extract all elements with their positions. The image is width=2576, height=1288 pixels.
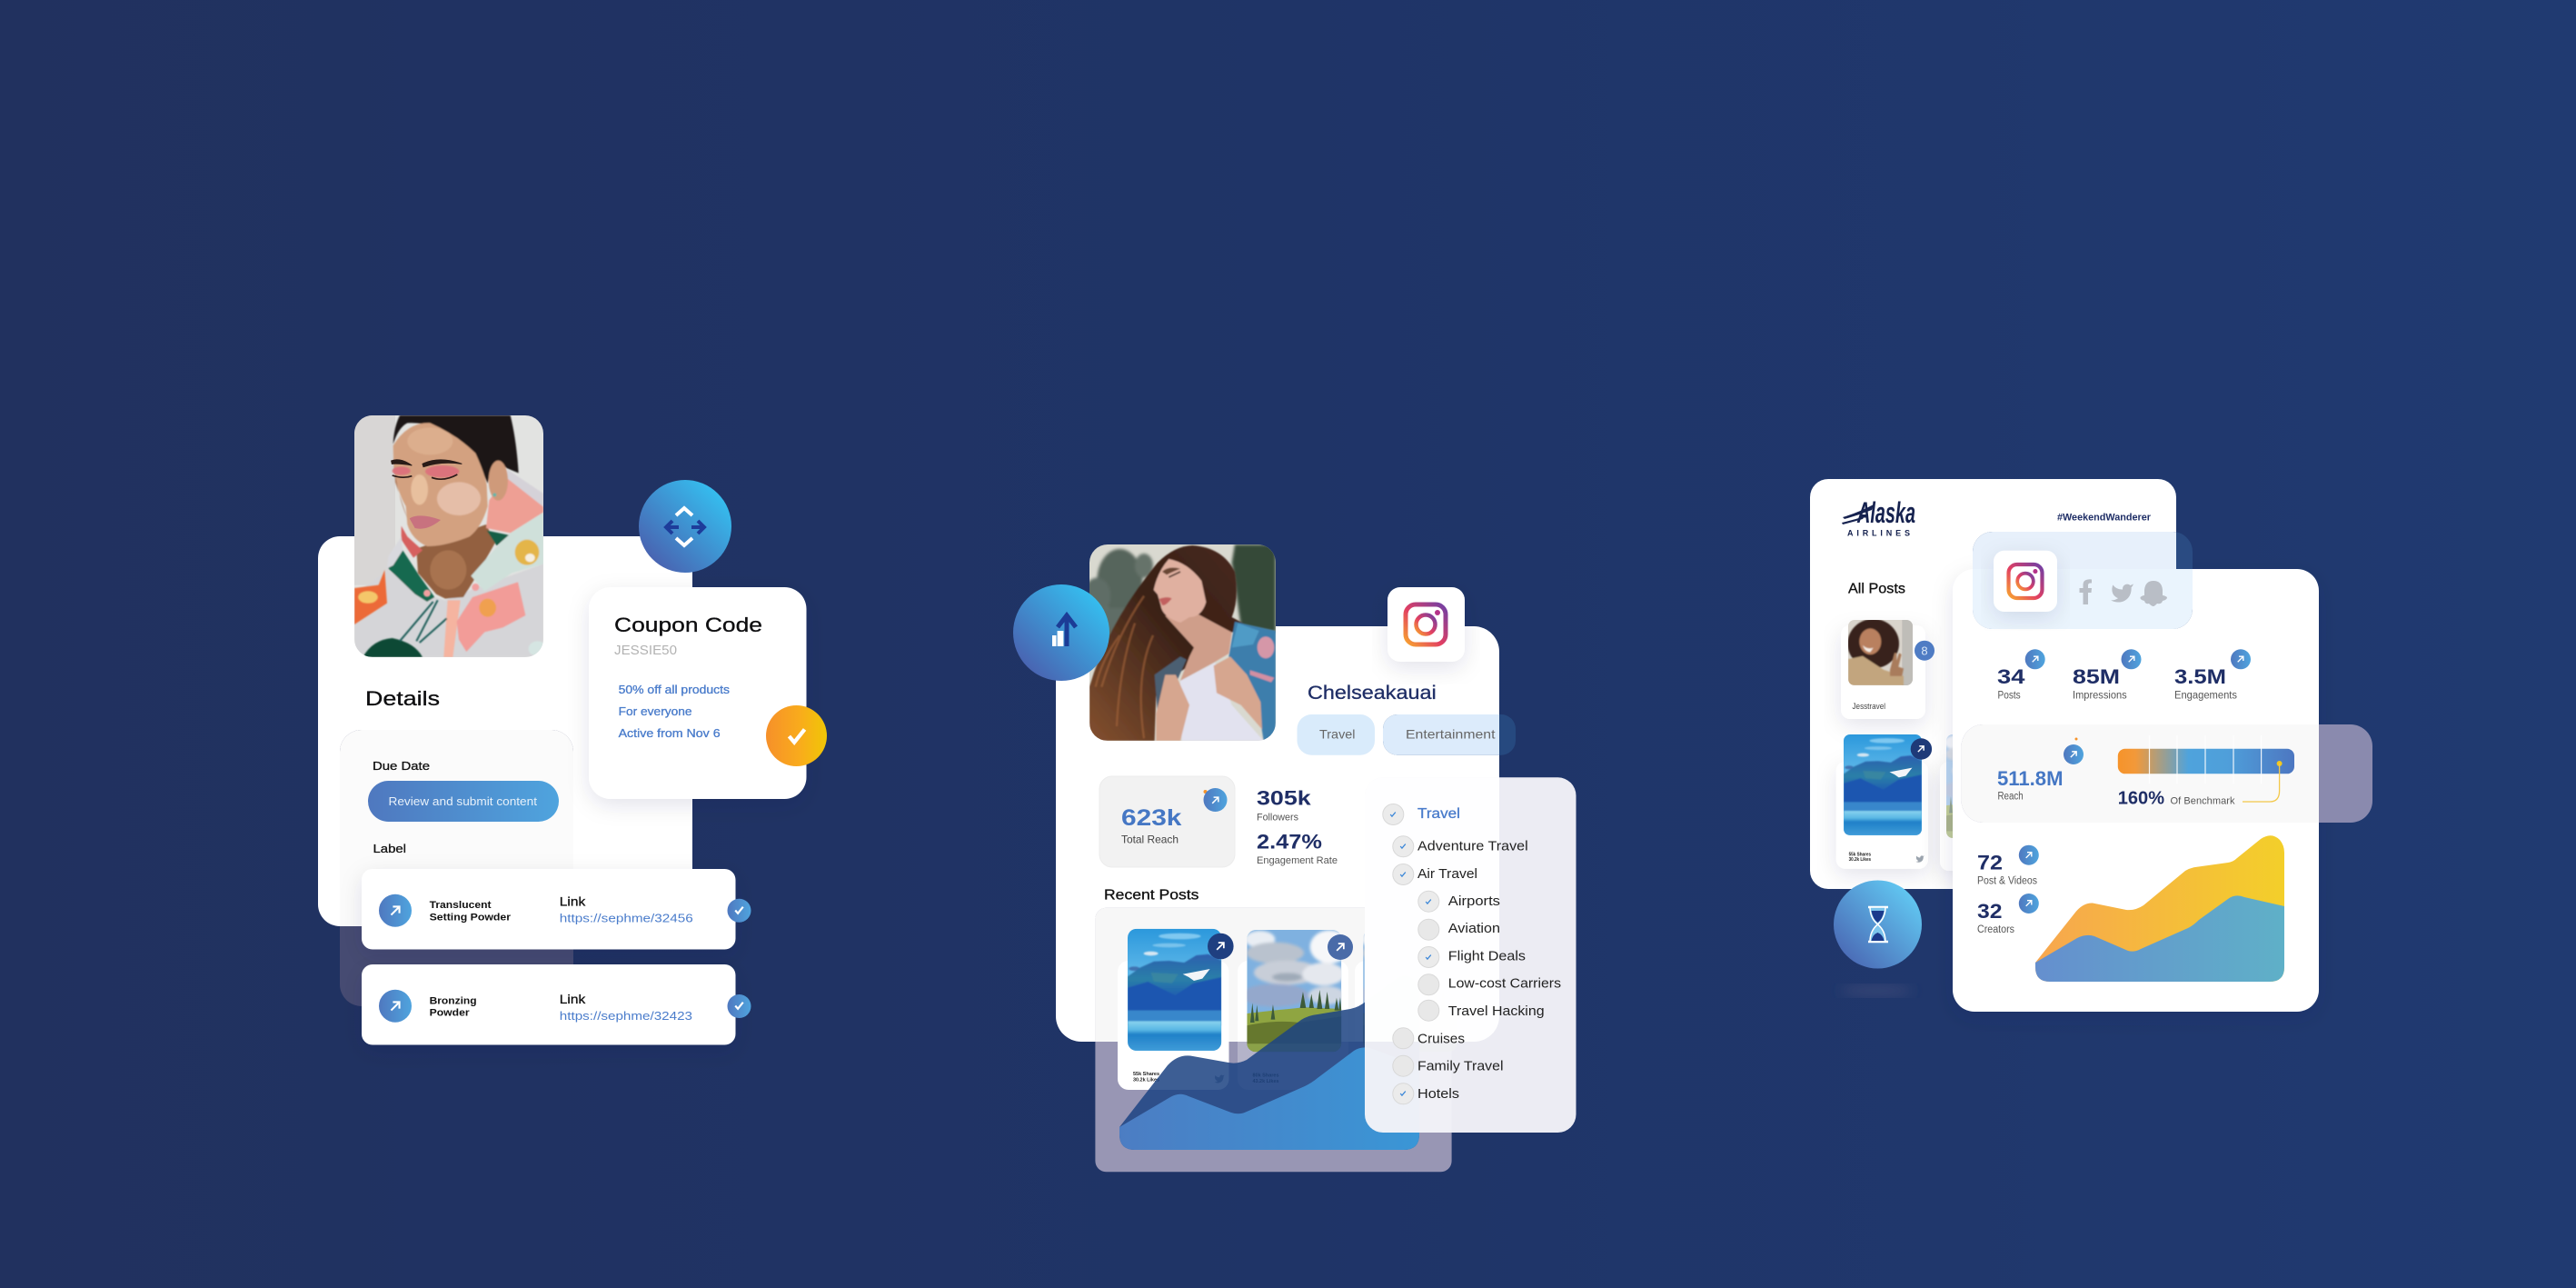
text: product name [430, 995, 477, 1019]
icon: count badge 8: 8 [1921, 644, 1928, 658]
checklist item: Air Travel: Air Travel [1417, 867, 1477, 882]
panel: coupon code card [589, 587, 807, 799]
photo: woman in floral jacket [354, 415, 547, 657]
logo: Alaska Airlines [1842, 496, 1915, 538]
stat: reach: 511.8M [1997, 767, 2063, 790]
stat: engagements: Engagements [2174, 690, 2237, 701]
panel: details card [318, 536, 692, 926]
heading: Chelseakauai: Chelseakauai [1308, 682, 1437, 704]
button: Review and submit content: Review and submit content [389, 795, 538, 808]
checklist item: Air Travel [1393, 864, 1477, 885]
card: mountain post: 30.2k Likes [1849, 857, 1871, 863]
heading: Details: Details [365, 687, 440, 710]
stat: reach [1997, 738, 2084, 802]
checklist item: Flight Deals: Flight Deals [1448, 950, 1526, 964]
text: product name [430, 900, 512, 923]
text: product link: Link [560, 993, 585, 1006]
checklist item: Airports: Airports [1448, 894, 1500, 909]
stat: posts [1997, 649, 2045, 701]
button: Review and submit content [368, 781, 559, 822]
label: Label: Label [373, 842, 406, 855]
card: jesstravel post: Jesstravel [1852, 702, 1885, 712]
text: product name: Powder [430, 1008, 470, 1019]
icon: move arrows circle [639, 480, 731, 573]
text: product link: Link [560, 895, 585, 909]
icon: instagram tile [1387, 587, 1465, 662]
checklist item: Low-cost Carriers [1418, 974, 1561, 995]
photo: woman with long hair [1083, 544, 1276, 741]
text: product name: Setting Powder [430, 912, 512, 923]
checklist item: Aviation: Aviation [1448, 922, 1500, 936]
checklist item: Aviation [1418, 919, 1500, 940]
stat: engagement rate: Engagement Rate [1257, 855, 1338, 866]
card: post 3 [1363, 934, 1365, 1047]
stat: post and videos: Post & Videos [1977, 876, 2037, 887]
text: product link [560, 895, 693, 924]
panel: results card [1953, 569, 2319, 1012]
text: product link: https://sephme/32423 [560, 1009, 692, 1023]
stat: engagements [2174, 649, 2251, 701]
card: post 1 [1118, 929, 1228, 1090]
heading: Recent Posts: Recent Posts [1104, 887, 1199, 903]
panel: campaign report composition [1810, 479, 2372, 1012]
stat: followers [1257, 787, 1311, 823]
text: product link [560, 993, 692, 1023]
hashtag: WeekendWanderer: #WeekendWanderer [2057, 513, 2152, 524]
icon: instagram tile [1994, 551, 2057, 612]
tag: Entertainment [1383, 714, 1516, 755]
card: post 2 [1238, 930, 1341, 1083]
checklist item: Low-cost Carriers: Low-cost Carriers [1448, 977, 1561, 992]
icon: post 1 arrow [1208, 934, 1234, 959]
panel: travel category checklist [1365, 777, 1576, 1133]
checklist item: Cruises [1393, 1028, 1465, 1049]
card: mountain post [1836, 734, 1928, 869]
stat: creators [1977, 894, 2039, 935]
panel: creator profile composition [1013, 544, 1576, 1172]
card: mountain post: 55k Shares [1849, 853, 1871, 858]
icon: snapchat [2140, 581, 2167, 606]
checklist item: Travel Hacking: Travel Hacking [1448, 1004, 1545, 1019]
stat: followers: Followers [1257, 812, 1298, 823]
tag: Entertainment: Entertainment [1406, 727, 1496, 742]
chart: recent posts area chart [1119, 976, 1419, 1150]
text: product link: https://sephme/32456 [560, 911, 693, 924]
stat: followers: 305k [1257, 787, 1311, 810]
checklist item: Family Travel: Family Travel [1417, 1060, 1503, 1074]
icon: row check badge [727, 994, 751, 1018]
stat: engagement rate: 2.47% [1257, 830, 1322, 853]
icon: post 2 arrow [1328, 934, 1353, 960]
icon: arrow badge [379, 990, 412, 1023]
code: JESSIE50: JESSIE50 [614, 644, 677, 658]
logo: Alaska Airlines: AIRLINES [1847, 529, 1910, 538]
card: post 1: 55k Shares [1133, 1072, 1159, 1077]
stat: impressions [2073, 649, 2141, 701]
icon: growth arrow circle [1013, 584, 1109, 681]
label: Due Date: Due Date [373, 759, 430, 773]
checklist item: Adventure Travel: Adventure Travel [1417, 840, 1528, 854]
panel: total reach: 623k [1121, 805, 1182, 831]
checklist item: Hotels: Hotels [1417, 1087, 1459, 1102]
panel: influencer details composition [318, 415, 827, 1045]
stat: benchmark: 160% [2118, 787, 2164, 808]
card: post 2: 80k Shares [1252, 1073, 1279, 1078]
checklist item: Family Travel [1393, 1055, 1503, 1076]
stat: posts: 34 [1997, 665, 2025, 688]
checklist item: Travel: Travel [1417, 806, 1460, 822]
text: coupon terms: Active from Nov 6 [619, 727, 721, 740]
stat: benchmark: Of Benchmark [2170, 795, 2235, 806]
text: coupon terms: For everyone [619, 705, 692, 718]
card: post 1: 30.2k Likes [1133, 1078, 1159, 1083]
stat: posts: Posts [1997, 690, 2021, 701]
checklist item: Hotels [1393, 1083, 1459, 1104]
panel: reach and benchmark [1962, 724, 2372, 823]
icon: orange check circle [766, 705, 827, 766]
icon: hourglass circle [1834, 880, 1922, 995]
icon: post arrow [1911, 738, 1932, 760]
chart: benchmark bar [2118, 735, 2294, 802]
stat: impressions: 85M [2073, 665, 2120, 688]
card: jesstravel post [1841, 619, 1925, 719]
icon: arrow badge [379, 894, 412, 927]
stat: engagements: 3.5M [2174, 665, 2226, 688]
stat: benchmark [2118, 787, 2235, 808]
text: coupon terms: 50% off all products [619, 684, 730, 696]
stat: reach: Reach [1997, 791, 2024, 802]
panel: product row Bronzing Powder [362, 964, 736, 1045]
text: coupon terms [619, 684, 730, 740]
icon: facebook [2079, 579, 2092, 604]
tag: Travel: Travel [1319, 727, 1356, 742]
panel: due date and label form [340, 730, 573, 1006]
card: partially hidden post [1934, 734, 1953, 882]
panel: total reach: Total Reach [1121, 833, 1179, 845]
panel: profile card [1056, 626, 1499, 1042]
stat: creators: Creators [1977, 924, 2014, 935]
panel: product row Translucent Setting Powder [362, 869, 736, 949]
panel: social network switcher [1973, 532, 2193, 629]
panel: campaign posts card [1810, 479, 2176, 889]
chart: performance area chart [2035, 835, 2284, 982]
text: product name: Translucent [430, 900, 492, 911]
text: product name: Bronzing [430, 995, 477, 1006]
icon: twitter [2111, 584, 2133, 603]
checklist item: Flight Deals [1418, 947, 1526, 967]
checklist item: Airports [1418, 891, 1500, 912]
stat: post and videos [1977, 845, 2039, 887]
checklist item: Travel Hacking [1418, 1000, 1545, 1021]
heading: All Posts: All Posts [1848, 582, 1905, 597]
stat: engagement rate [1257, 830, 1338, 866]
checklist item: Adventure Travel [1393, 836, 1528, 857]
logo: Alaska Airlines: Alaska [1856, 496, 1915, 529]
card: post 2: 43.2k Likes [1252, 1079, 1279, 1084]
checklist item: Cruises: Cruises [1417, 1033, 1465, 1047]
stat: impressions: Impressions [2073, 690, 2127, 701]
icon: row check badge [727, 899, 751, 923]
checklist item: Travel [1383, 804, 1460, 825]
icon: count badge 8 [1915, 641, 1934, 661]
panel: recent posts tray [1095, 908, 1452, 1172]
heading: Coupon Code: Coupon Code [614, 614, 762, 636]
stat: post and videos: 72 [1977, 852, 2003, 874]
panel: total reach [1099, 776, 1235, 867]
stat: creators: 32 [1977, 900, 2003, 923]
tag: Travel [1298, 714, 1375, 755]
